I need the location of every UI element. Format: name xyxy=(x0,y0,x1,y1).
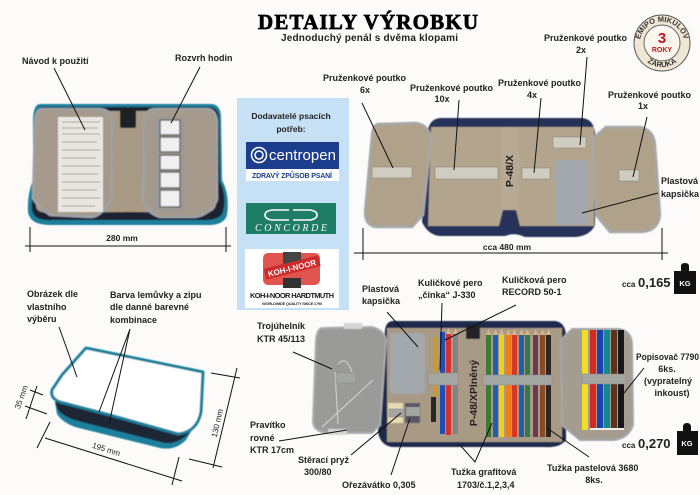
logo: koh-i-noor: KOH-I-NOOR HARDTMUTH xyxy=(250,291,334,300)
leader lines: closed case xyxy=(59,327,130,424)
label: binding and zip colour: Barva lemůvky a zipu xyxy=(110,290,202,300)
instruction sheet text stripes xyxy=(62,122,100,206)
warranty badge: EMIPO MIKULOV xyxy=(635,16,689,39)
label: plastic pocket xyxy=(661,176,700,199)
label: sharpener: Ořezávátko 0,305 xyxy=(342,480,416,490)
label: timetable: Rozvrh hodin xyxy=(175,53,232,63)
label: loops 10x: Pruženkové poutko xyxy=(410,83,494,93)
label: loops 2x xyxy=(544,33,628,55)
dimension: 35 mm: 35 mm xyxy=(13,384,30,410)
weight: 0,270 kg: 0,270 xyxy=(638,436,671,451)
weight: 0,165 kg: cca xyxy=(622,280,636,289)
label: picture of own choice: výběru xyxy=(27,314,57,324)
dimension: 35 mm xyxy=(13,384,47,419)
label: triangle: Trojúhelník xyxy=(257,321,306,331)
dimension: cca 480 mm: cca 480 mm xyxy=(483,242,532,252)
label: eraser: 300/80 xyxy=(304,467,332,477)
weight: 0,165 kg: 0,165 xyxy=(638,275,671,290)
label: ballpoint record: Kuličková pero xyxy=(502,275,567,285)
weight: 0,270 kg xyxy=(622,423,698,455)
weight: 0,270 kg: cca xyxy=(622,441,636,450)
label: loops 2x: 2x xyxy=(576,45,586,55)
label: triangle: KTR 45/113 xyxy=(257,334,305,344)
label: ruler xyxy=(250,420,294,455)
label: loops 1x xyxy=(608,90,692,111)
label: plastic pocket: kapsička xyxy=(661,189,700,199)
dimension: 195 mm xyxy=(37,422,182,485)
label: ballpoint record: RECORD 50-1 xyxy=(502,287,562,297)
label: loops 4x xyxy=(498,78,582,100)
label: loops 4x: 4x xyxy=(527,90,537,100)
weight: 0,270 kg: KG xyxy=(681,439,693,448)
dimension: cca 480 mm xyxy=(354,228,668,260)
label: plastic pocket: Plastová xyxy=(661,176,699,186)
photo: open organiser with instructions and timetable xyxy=(28,104,228,225)
label: plastic pocket filled: kapsička xyxy=(362,296,401,306)
label: graphite pencil: Tužka grafitová xyxy=(451,467,517,477)
dimension: 280 mm xyxy=(25,227,231,252)
label: loops 1x: Pruženkové poutko xyxy=(608,90,692,100)
label: binding and zip colour xyxy=(110,290,202,325)
ruler and triangle on left flap xyxy=(322,361,373,427)
logo: centropen xyxy=(246,142,339,181)
leader lines: filled case xyxy=(279,303,644,475)
label: loops 2x: Pruženkové poutko xyxy=(544,33,628,43)
logo: centropen: centropen xyxy=(269,147,336,164)
model code P-48/X: P-48/X xyxy=(504,155,516,187)
label: ballpoint cinka xyxy=(418,278,483,300)
dimension: 195 mm: 195 mm xyxy=(91,441,122,458)
label: markers: inkoust) xyxy=(654,388,690,398)
label: picture of own choice: Obrázek dle xyxy=(27,289,78,299)
pencil loops: filled case xyxy=(336,373,626,417)
weight: 0,165 kg xyxy=(622,263,696,294)
label: coloured pencil xyxy=(547,463,638,485)
label: instructions: Návod k použití xyxy=(22,56,89,66)
weight: 0,165 kg: KG xyxy=(679,279,691,288)
logo: centropen: ZDRAVÝ ZPŮSOB PSANÍ xyxy=(252,170,333,180)
logo: koh-i-noor xyxy=(245,249,339,308)
leader lines: organiser xyxy=(54,67,200,130)
label: loops 6x: 6x xyxy=(360,85,370,95)
photo: closed pencil case xyxy=(52,348,203,449)
label: picture of own choice xyxy=(27,289,78,324)
label: triangle xyxy=(257,321,306,344)
pens and graphite pencils xyxy=(431,328,458,435)
label: ballpoint cinka: „činka“ J-330 xyxy=(418,290,476,300)
label: coloured pencil: Tužka pastelová 3680 xyxy=(547,463,638,473)
label: loops 10x: 10x xyxy=(434,94,450,104)
supplier heading: Dodavatelé psacích xyxy=(251,111,331,121)
logo: concorde xyxy=(246,203,336,234)
label: picture of own choice: vlastního xyxy=(27,302,67,312)
label: ballpoint record xyxy=(502,275,567,297)
label: plastic pocket filled xyxy=(362,284,401,306)
subtitle: Jednoduchý penál s dvěma klopami xyxy=(281,33,458,44)
label: markers: (vypratelný xyxy=(644,376,692,386)
photo: filled pencil case xyxy=(313,321,633,447)
warranty badge: ROKY xyxy=(652,47,672,54)
title: DETAILY VÝROBKU xyxy=(258,10,478,34)
label: binding and zip colour: kombinace xyxy=(110,315,157,325)
label: markers xyxy=(636,352,699,398)
label: loops 6x: Pruženkové poutko xyxy=(323,73,407,83)
label: graphite pencil xyxy=(451,467,517,490)
label: ruler: Pravítko xyxy=(250,420,286,430)
model code P-48/XPlněný: P-48/XPlněný xyxy=(468,360,480,426)
label: eraser: Stěrací pryž xyxy=(298,455,350,465)
label: ruler: KTR 17cm xyxy=(250,445,294,455)
warranty badge xyxy=(634,14,690,72)
label: coloured pencil: 8ks. xyxy=(585,475,603,485)
logo: koh-i-noor: WORLDWIDE QUALITY SINCE 1790 xyxy=(262,301,323,306)
logo: koh-i-noor: KOH-I-NOOR xyxy=(267,258,317,279)
dimension: 280 mm: 280 mm xyxy=(106,233,138,243)
label: eraser xyxy=(298,455,350,477)
label: loops 6x xyxy=(323,73,407,95)
label: loops 1x: 1x xyxy=(638,101,648,111)
dimension: 130 mm xyxy=(189,368,240,468)
warranty badge: ZÁRUKA xyxy=(647,58,677,68)
warranty badge: 3 xyxy=(658,30,666,47)
label: ballpoint cinka: Kuličkové pero xyxy=(418,278,483,288)
pencil loops: empty case xyxy=(372,137,639,181)
label: loops 10x xyxy=(410,83,494,104)
label: ruler: rovné xyxy=(250,433,275,443)
label: plastic pocket filled: Plastová xyxy=(362,284,400,294)
photo: empty pencil case xyxy=(365,118,660,237)
coloured pencils xyxy=(486,329,551,437)
label: graphite pencil: 1703/č.1,2,3,4 xyxy=(457,480,515,490)
panel: suppliers: potřeb: xyxy=(276,124,306,134)
label: loops 4x: Pruženkové poutko xyxy=(498,78,582,88)
panel: suppliers xyxy=(237,98,349,310)
label: binding and zip colour: dle danné barevné xyxy=(110,302,189,312)
markers xyxy=(582,330,624,430)
leader lines: empty case xyxy=(362,57,658,213)
dimension: 130 mm: 130 mm xyxy=(210,408,225,438)
logo: concorde: CONCORDE xyxy=(255,223,327,234)
label: markers: 6ks. xyxy=(658,364,676,374)
